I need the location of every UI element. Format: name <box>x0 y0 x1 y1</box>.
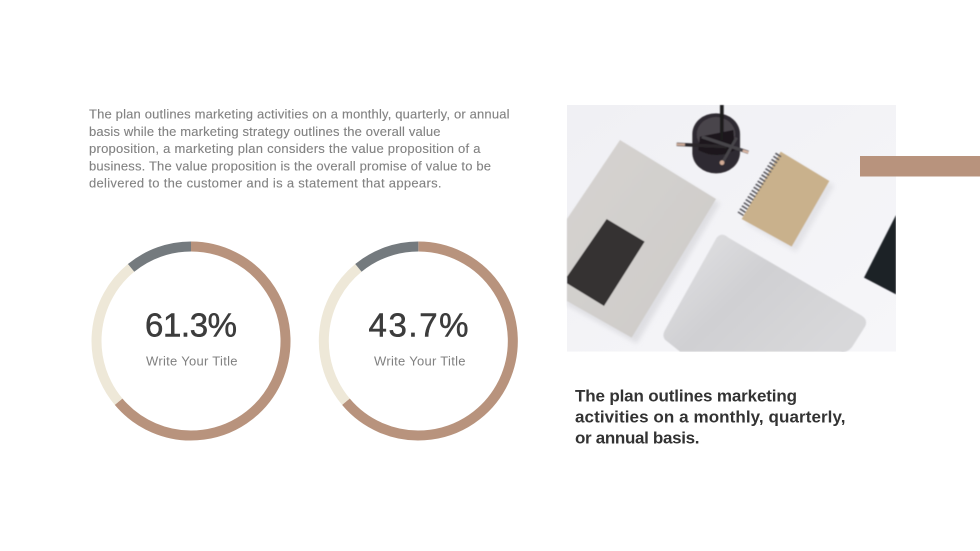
label: Write Your Title <box>374 354 466 369</box>
value: 61.3%: 61.3% <box>145 307 237 344</box>
ring segment: grey <box>131 246 191 268</box>
donut chart: 61.3% <box>97 246 286 435</box>
body paragraph: proposition, a marketing plan considers the value proposition of a <box>89 141 481 156</box>
ring segment: grey <box>358 246 418 268</box>
body paragraph <box>89 106 510 191</box>
slide canvas <box>89 104 980 444</box>
body paragraph: basis while the marketing strategy outlines the overall value <box>89 124 440 139</box>
ring segment: brown <box>346 246 513 436</box>
callout heading <box>575 387 846 447</box>
ring segment: brown <box>119 246 286 435</box>
accent bar <box>860 156 980 176</box>
label: Write Your Title <box>146 354 238 369</box>
ring segment: cream <box>97 268 131 402</box>
callout heading: The plan outlines marketing <box>575 387 797 406</box>
photo: desk flat lay <box>567 105 896 352</box>
callout heading: or annual basis. <box>575 428 700 447</box>
callout heading: activities on a monthly, quarterly, <box>575 408 846 426</box>
value: 43.7%: 43.7% <box>368 307 468 344</box>
ring segment: cream <box>324 268 358 402</box>
body paragraph: delivered to the customer and is a statement that appears. <box>89 176 442 191</box>
body paragraph: business. The value proposition is the overall promise of value to be <box>89 158 491 173</box>
donut chart: 43.7% <box>324 246 513 436</box>
body paragraph: The plan outlines marketing activities on a monthly, quarterly, or annual <box>89 106 510 122</box>
